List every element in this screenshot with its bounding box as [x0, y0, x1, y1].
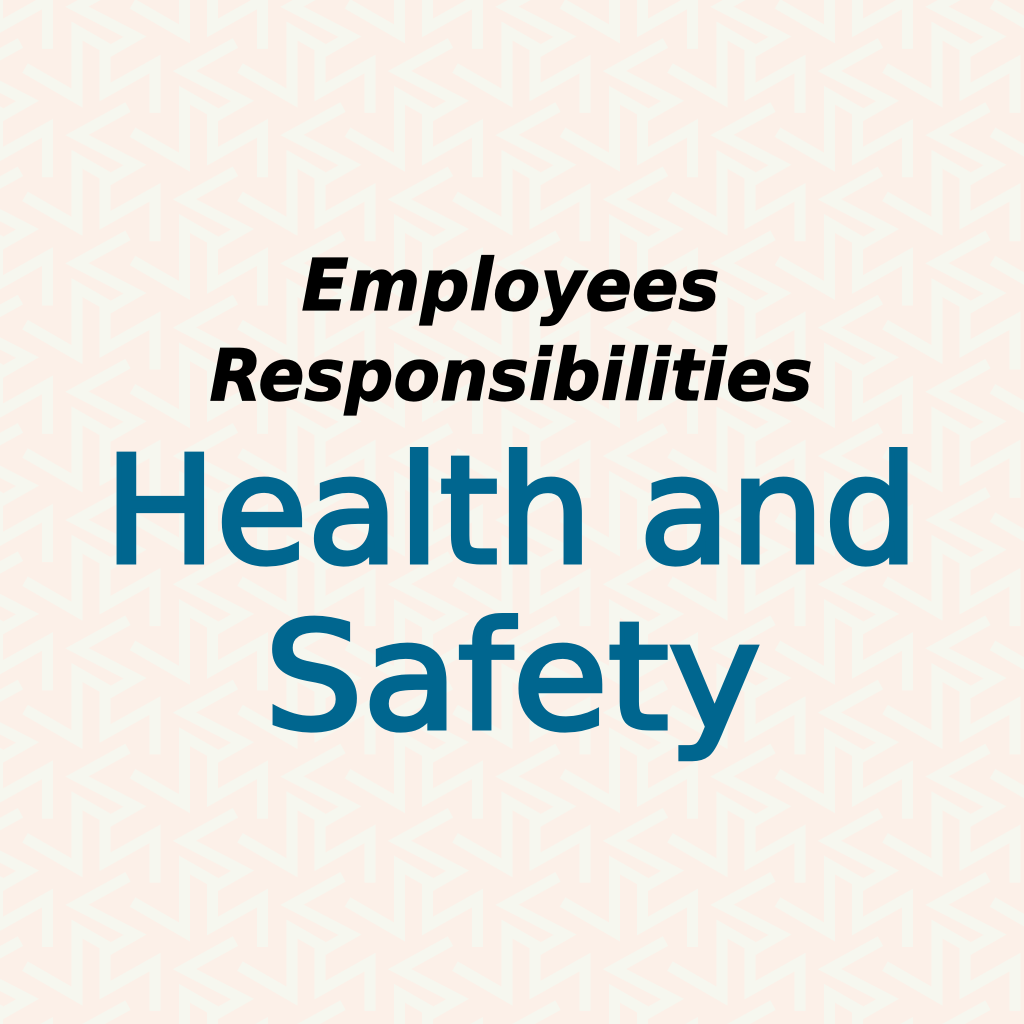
heading line 2: Responsibilities [210, 334, 812, 417]
title line 1: Health and [104, 425, 918, 597]
title line 2: Safety [264, 591, 760, 763]
heading line 1: Employees [302, 244, 720, 327]
heading: Employees Responsibilities [210, 244, 812, 417]
title: Health and Safety [104, 425, 918, 763]
